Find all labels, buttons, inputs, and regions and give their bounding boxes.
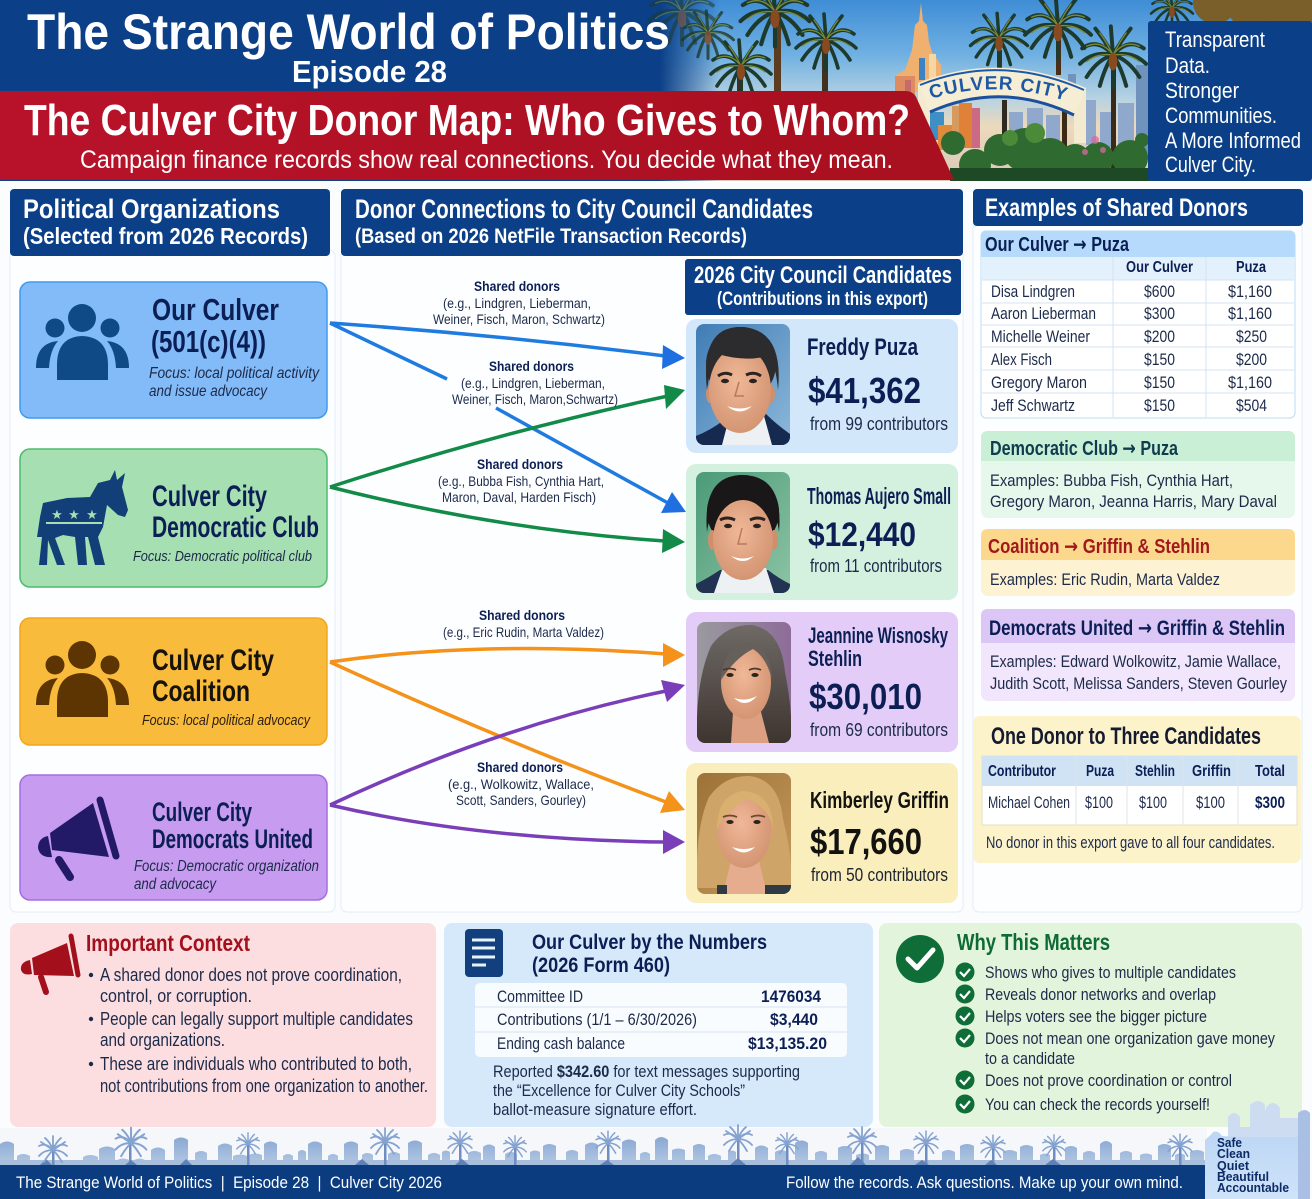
panel: our culver by the numbers: ballot-measure signature effort. — [493, 1100, 697, 1119]
panel: important context: and organizations. — [100, 1030, 225, 1050]
icon: document — [465, 929, 503, 977]
values tag: Quiet — [1217, 1158, 1250, 1173]
photo: Freddy Puza — [696, 324, 790, 445]
episode label: Episode 28 — [292, 54, 447, 89]
candidates heading — [685, 259, 961, 315]
tagline box: Culver City. — [1165, 152, 1256, 177]
candidate card: Jeannine Wisnosky Stehlin: from 69 contributors — [810, 720, 948, 740]
strapline: Campaign finance records show real connections. You decide what they mean. — [80, 146, 893, 174]
panel: why this matters: to a candidate — [985, 1049, 1075, 1068]
arrow: Democrats United to Stehlin — [330, 680, 685, 805]
panel: why this matters: Shows who gives to multiple candidates — [985, 963, 1236, 982]
org card: Democratic Club: Focus: Democratic political club — [133, 548, 312, 565]
label: shared donors Democrats United — [448, 759, 594, 808]
candidate card: Kimberley Griffin: Kimberley Griffin — [810, 787, 949, 813]
table: Michael Cohen: $100 — [1085, 793, 1113, 812]
table: Our Culver to Puza: $300 — [1144, 304, 1175, 323]
icon: donkey: ★ — [86, 507, 98, 522]
org card: Democrats United: and advocacy — [134, 876, 217, 893]
org card: Coalition: Culver City — [152, 644, 274, 677]
panel: important context: Important Context — [86, 930, 250, 956]
card: one donor to three candidates — [973, 716, 1301, 863]
table: Our Culver to Puza: Gregory Maron — [991, 373, 1087, 392]
table: Our Culver to Puza: $1,160 — [1228, 282, 1272, 301]
table: committee figures: 1476034 — [761, 987, 821, 1006]
table: Michael Cohen: Michael Cohen — [988, 793, 1070, 812]
candidate card: Kimberley Griffin: $17,660 — [810, 821, 922, 862]
header illustration: Culver City arch and palms — [647, 0, 1312, 181]
tagline box: Data. — [1165, 53, 1210, 78]
candidate card: Freddy Puza: Freddy Puza — [807, 334, 919, 361]
label: shared donors Our Culver to Small: Shared donors — [489, 358, 574, 374]
arch sign — [918, 68, 1086, 143]
table: Our Culver to Puza: Our Culver → Puza — [985, 232, 1130, 256]
table: Our Culver to Puza: Puza — [1236, 259, 1266, 276]
table: Our Culver to Puza: Aaron Lieberman — [991, 304, 1096, 323]
icon: group of people — [36, 304, 129, 380]
org card: Coalition: Focus: local political advocacy — [142, 712, 311, 729]
values tag: Clean — [1217, 1146, 1250, 1161]
candidate card: Jeannine Wisnosky Stehlin — [686, 612, 958, 752]
subtitle banner — [0, 91, 954, 180]
panel: our culver by the numbers: Reported $342.60 for text messages supporting — [493, 1062, 800, 1081]
candidate card: Freddy Puza — [686, 319, 958, 453]
footer skyline — [0, 1125, 1207, 1165]
column heading: organizations: Political Organizations — [23, 194, 280, 224]
table: Michael Cohen — [982, 756, 1297, 825]
org card: Democratic Club: Culver City — [152, 480, 267, 513]
column heading: connections: Donor Connections to City Council Candidates — [355, 194, 813, 224]
candidate card: Kimberley Griffin — [686, 763, 958, 903]
icons: small checks — [956, 962, 974, 1114]
table: Michael Cohen: $100 — [1196, 793, 1225, 812]
table: Our Culver to Puza: Alex Fisch — [991, 350, 1052, 369]
candidate card: Freddy Puza: from 99 contributors — [810, 414, 948, 434]
footer bar: Follow the records. Ask questions. Make up your own mind. — [786, 1173, 1183, 1192]
values tag — [1205, 1101, 1310, 1199]
table: Our Culver to Puza: $1,160 — [1228, 373, 1272, 392]
org card: Our Culver: Our Culver — [152, 292, 279, 327]
title: The Strange World of Politics — [27, 4, 670, 60]
label: shared donors Our Culver to Puza: Shared donors — [474, 278, 560, 294]
values tag: Accountable — [1217, 1180, 1289, 1195]
org card: Our Culver: Focus: local political activity — [149, 365, 320, 382]
panel: why this matters — [879, 923, 1302, 1127]
card: Democrats United to Griffin and Stehlin: Democrats United → Griffin & Stehlin — [989, 616, 1285, 640]
label: shared donors Our Culver to Puza — [433, 278, 605, 327]
values tag: Safe — [1217, 1135, 1242, 1150]
arrow: Coalition to Stehlin — [330, 643, 685, 667]
table: Michael Cohen: Griffin — [1192, 763, 1231, 780]
candidate card: Thomas Aujero Small — [686, 464, 958, 600]
table: Our Culver to Puza: $200 — [1236, 350, 1267, 369]
table: committee figures: $13,135.20 — [748, 1034, 827, 1053]
panel: donor connections — [330, 189, 963, 912]
table: committee figures — [475, 983, 847, 1057]
table: committee figures: Committee ID — [497, 987, 583, 1006]
org card: Democratic Club — [20, 449, 327, 587]
org card: Democrats United: Culver City — [152, 797, 252, 827]
arrow: Our Culver to Small — [330, 323, 686, 513]
label: shared donors Democratic Club — [438, 456, 604, 505]
org card: Democratic Club: Democratic Club — [152, 511, 319, 544]
label: shared donors Our Culver to Small — [452, 358, 618, 407]
candidate card: Kimberley Griffin: from 50 contributors — [811, 865, 948, 885]
tagline box — [1148, 21, 1312, 181]
org card: Our Culver: (501(c)(4)) — [151, 324, 266, 359]
label: shared donors Democrats United: Shared donors — [477, 759, 563, 775]
label: shared donors Coalition: (e.g., Eric Rudin, Marta Valdez) — [443, 624, 604, 640]
column heading: examples: Examples of Shared Donors — [985, 194, 1248, 222]
label: shared donors Our Culver to Puza: (e.g., Lindgren, Lieberman, — [443, 295, 591, 311]
table: Michael Cohen: $100 — [1139, 793, 1167, 812]
panel: examples of shared donors — [973, 189, 1303, 912]
panel: our culver by the numbers — [444, 923, 873, 1127]
candidate card: Thomas Aujero Small: $12,440 — [808, 516, 916, 554]
candidate card: Thomas Aujero Small: from 11 contributors — [810, 556, 942, 576]
heading: The Culver City Donor Map: Who Gives to Whom? — [24, 96, 910, 145]
table: Our Culver to Puza: $200 — [1144, 327, 1175, 346]
arrow: Democratic Club to Small — [330, 487, 685, 553]
top right foliage — [1193, 0, 1312, 32]
org card: Coalition: Coalition — [152, 675, 250, 708]
label: shared donors Our Culver to Small: (e.g., Lindgren, Lieberman, — [461, 375, 605, 391]
tagline box: Communities. — [1165, 103, 1277, 128]
values tag: Beautiful — [1217, 1169, 1269, 1184]
card: Democratic Club to Puza: Gregory Maron, Jeanna Harris, Mary Daval — [990, 492, 1277, 511]
candidate card: Jeannine Wisnosky Stehlin: Stehlin — [808, 646, 862, 671]
icon: large check — [896, 935, 944, 983]
panel: why this matters: You can check the records yourself! — [985, 1095, 1210, 1114]
candidate card: Jeannine Wisnosky Stehlin: $30,010 — [809, 676, 922, 717]
label: shared donors Our Culver to Puza: Weiner, Fisch, Maron, Schwartz) — [433, 311, 605, 327]
column heading: organizations: (Selected from 2026 Records) — [23, 223, 308, 249]
org card: Democrats United: Focus: Democratic organization — [134, 858, 319, 875]
table: Our Culver to Puza — [981, 231, 1295, 418]
arch sign: CULVER CITY — [930, 76, 1068, 100]
icon: donkey: ★ — [51, 507, 63, 522]
panel: our culver by the numbers: Our Culver by the Numbers — [532, 931, 767, 954]
icon: donkey — [37, 470, 128, 565]
photo: Jeannine Wisnosky Stehlin — [697, 622, 791, 743]
table: Our Culver to Puza: $250 — [1236, 327, 1267, 346]
panel: why this matters: Does not prove coordination or control — [985, 1071, 1232, 1090]
panel: important context: not contributions from one organization to another. — [100, 1076, 428, 1096]
table: Our Culver to Puza: Disa Lindgren — [991, 282, 1075, 301]
photo: Kimberley Griffin — [697, 773, 791, 894]
card: Democratic Club to Puza: Examples: Bubba Fish, Cynthia Hart, — [990, 471, 1233, 490]
footer bar — [0, 1165, 1206, 1199]
tagline box: Transparent — [1165, 27, 1265, 52]
tower — [895, 3, 942, 116]
table: Michael Cohen: Contributor — [988, 763, 1056, 780]
panel: political organizations — [10, 189, 335, 912]
table: committee figures: $3,440 — [770, 1010, 818, 1029]
table: Our Culver to Puza: $504 — [1236, 396, 1267, 415]
label: shared donors Democrats United: (e.g., Wolkowitz, Wallace, — [448, 776, 594, 792]
column heading: organizations — [10, 189, 330, 256]
label: shared donors Democrats United: Scott, Sanders, Gourley) — [456, 792, 586, 808]
label: shared donors Democratic Club: Maron, Daval, Harden Fisch) — [442, 489, 596, 505]
panel: why this matters: Why This Matters — [957, 929, 1110, 955]
panel: important context: A shared donor does not prove coordination, — [100, 965, 402, 985]
icon: megaphone — [38, 800, 116, 877]
icon: group of people — [36, 641, 129, 717]
column heading: connections — [341, 189, 963, 256]
panel: our culver by the numbers: (2026 Form 460) — [532, 954, 670, 977]
arrow: Coalition to Griffin — [330, 662, 685, 813]
org card: Democrats United — [20, 775, 327, 900]
header banner — [0, 0, 1312, 181]
arrow: Our Culver to Puza — [330, 323, 685, 369]
table: Our Culver to Puza: $600 — [1144, 282, 1175, 301]
table: Michael Cohen: Total — [1255, 763, 1285, 780]
table: Michael Cohen: $300 — [1255, 793, 1285, 812]
arrow: Democratic Club to Puza — [330, 385, 685, 487]
card: Coalition to Griffin and Stehlin: Examples: Eric Rudin, Marta Valdez — [990, 570, 1220, 589]
table: Our Culver to Puza: Jeff Schwartz — [991, 396, 1075, 415]
icon: red megaphone — [21, 936, 78, 992]
arrow: Democrats United to Griffin — [330, 805, 685, 854]
card: Coalition to Griffin and Stehlin: Coalition → Griffin & Stehlin — [988, 534, 1210, 558]
table: Michael Cohen: Puza — [1086, 763, 1114, 780]
icon: donkey: ★ — [68, 507, 80, 522]
table: committee figures: Contributions (1/1 – 6/30/2026) — [497, 1010, 697, 1029]
panel: important context — [10, 923, 436, 1127]
panel: important context: These are individuals who contributed to both, — [100, 1054, 412, 1074]
org card: Our Culver — [20, 282, 327, 418]
photo: Thomas Aujero Small — [696, 472, 790, 593]
footer bar: The Strange World of Politics | Episode 28 | Culver City 2026 — [16, 1173, 442, 1192]
panel: why this matters: Helps voters see the bigger picture — [985, 1007, 1207, 1026]
candidate card: Freddy Puza: $41,362 — [808, 370, 921, 411]
candidate card: Thomas Aujero Small: Thomas Aujero Small — [807, 483, 951, 509]
card: Democratic Club to Puza — [981, 431, 1295, 518]
label: shared donors Coalition — [443, 607, 604, 640]
table: committee figures: Ending cash balance — [497, 1034, 625, 1053]
label: shared donors Democratic Club: Shared donors — [477, 456, 563, 472]
candidates heading: (Contributions in this export) — [717, 289, 928, 310]
table: Our Culver to Puza: $150 — [1144, 350, 1175, 369]
table: Our Culver to Puza: $150 — [1144, 373, 1175, 392]
card: Coalition to Griffin and Stehlin — [981, 529, 1295, 596]
panel: our culver by the numbers: the “Excellence for Culver City Schools” — [493, 1081, 745, 1100]
tagline box: Stronger — [1165, 78, 1239, 103]
org card: Coalition — [20, 618, 327, 745]
label: shared donors Democratic Club: (e.g., Bubba Fish, Cynthia Hart, — [438, 473, 604, 489]
table: Our Culver to Puza: $150 — [1144, 396, 1175, 415]
table: Michael Cohen: Stehlin — [1135, 763, 1175, 780]
label: shared donors Coalition: Shared donors — [479, 607, 565, 623]
table: Our Culver to Puza: Michelle Weiner — [991, 327, 1090, 346]
candidates heading: 2026 City Council Candidates — [694, 262, 952, 289]
candidate card: Jeannine Wisnosky Stehlin: Jeannine Wisnosky — [808, 623, 949, 648]
org card: Our Culver: and issue advocacy — [149, 383, 268, 400]
panel: important context: People can legally support multiple candidates — [100, 1009, 413, 1029]
panel: why this matters: Reveals donor networks and overlap — [985, 985, 1216, 1004]
card: Democratic Club to Puza: Democratic Club → Puza — [990, 436, 1179, 460]
column heading: connections: (Based on 2026 NetFile Transaction Records) — [355, 225, 747, 248]
card: Democrats United to Griffin and Stehlin — [981, 609, 1295, 701]
label: shared donors Our Culver to Small: Weiner, Fisch, Maron,Schwartz) — [452, 391, 618, 407]
table: Our Culver to Puza: $1,160 — [1228, 304, 1272, 323]
panel: important context: control, or corruption. — [100, 986, 252, 1006]
table: Our Culver to Puza: Our Culver — [1126, 259, 1193, 276]
org card: Democrats United: Democrats United — [152, 824, 313, 854]
